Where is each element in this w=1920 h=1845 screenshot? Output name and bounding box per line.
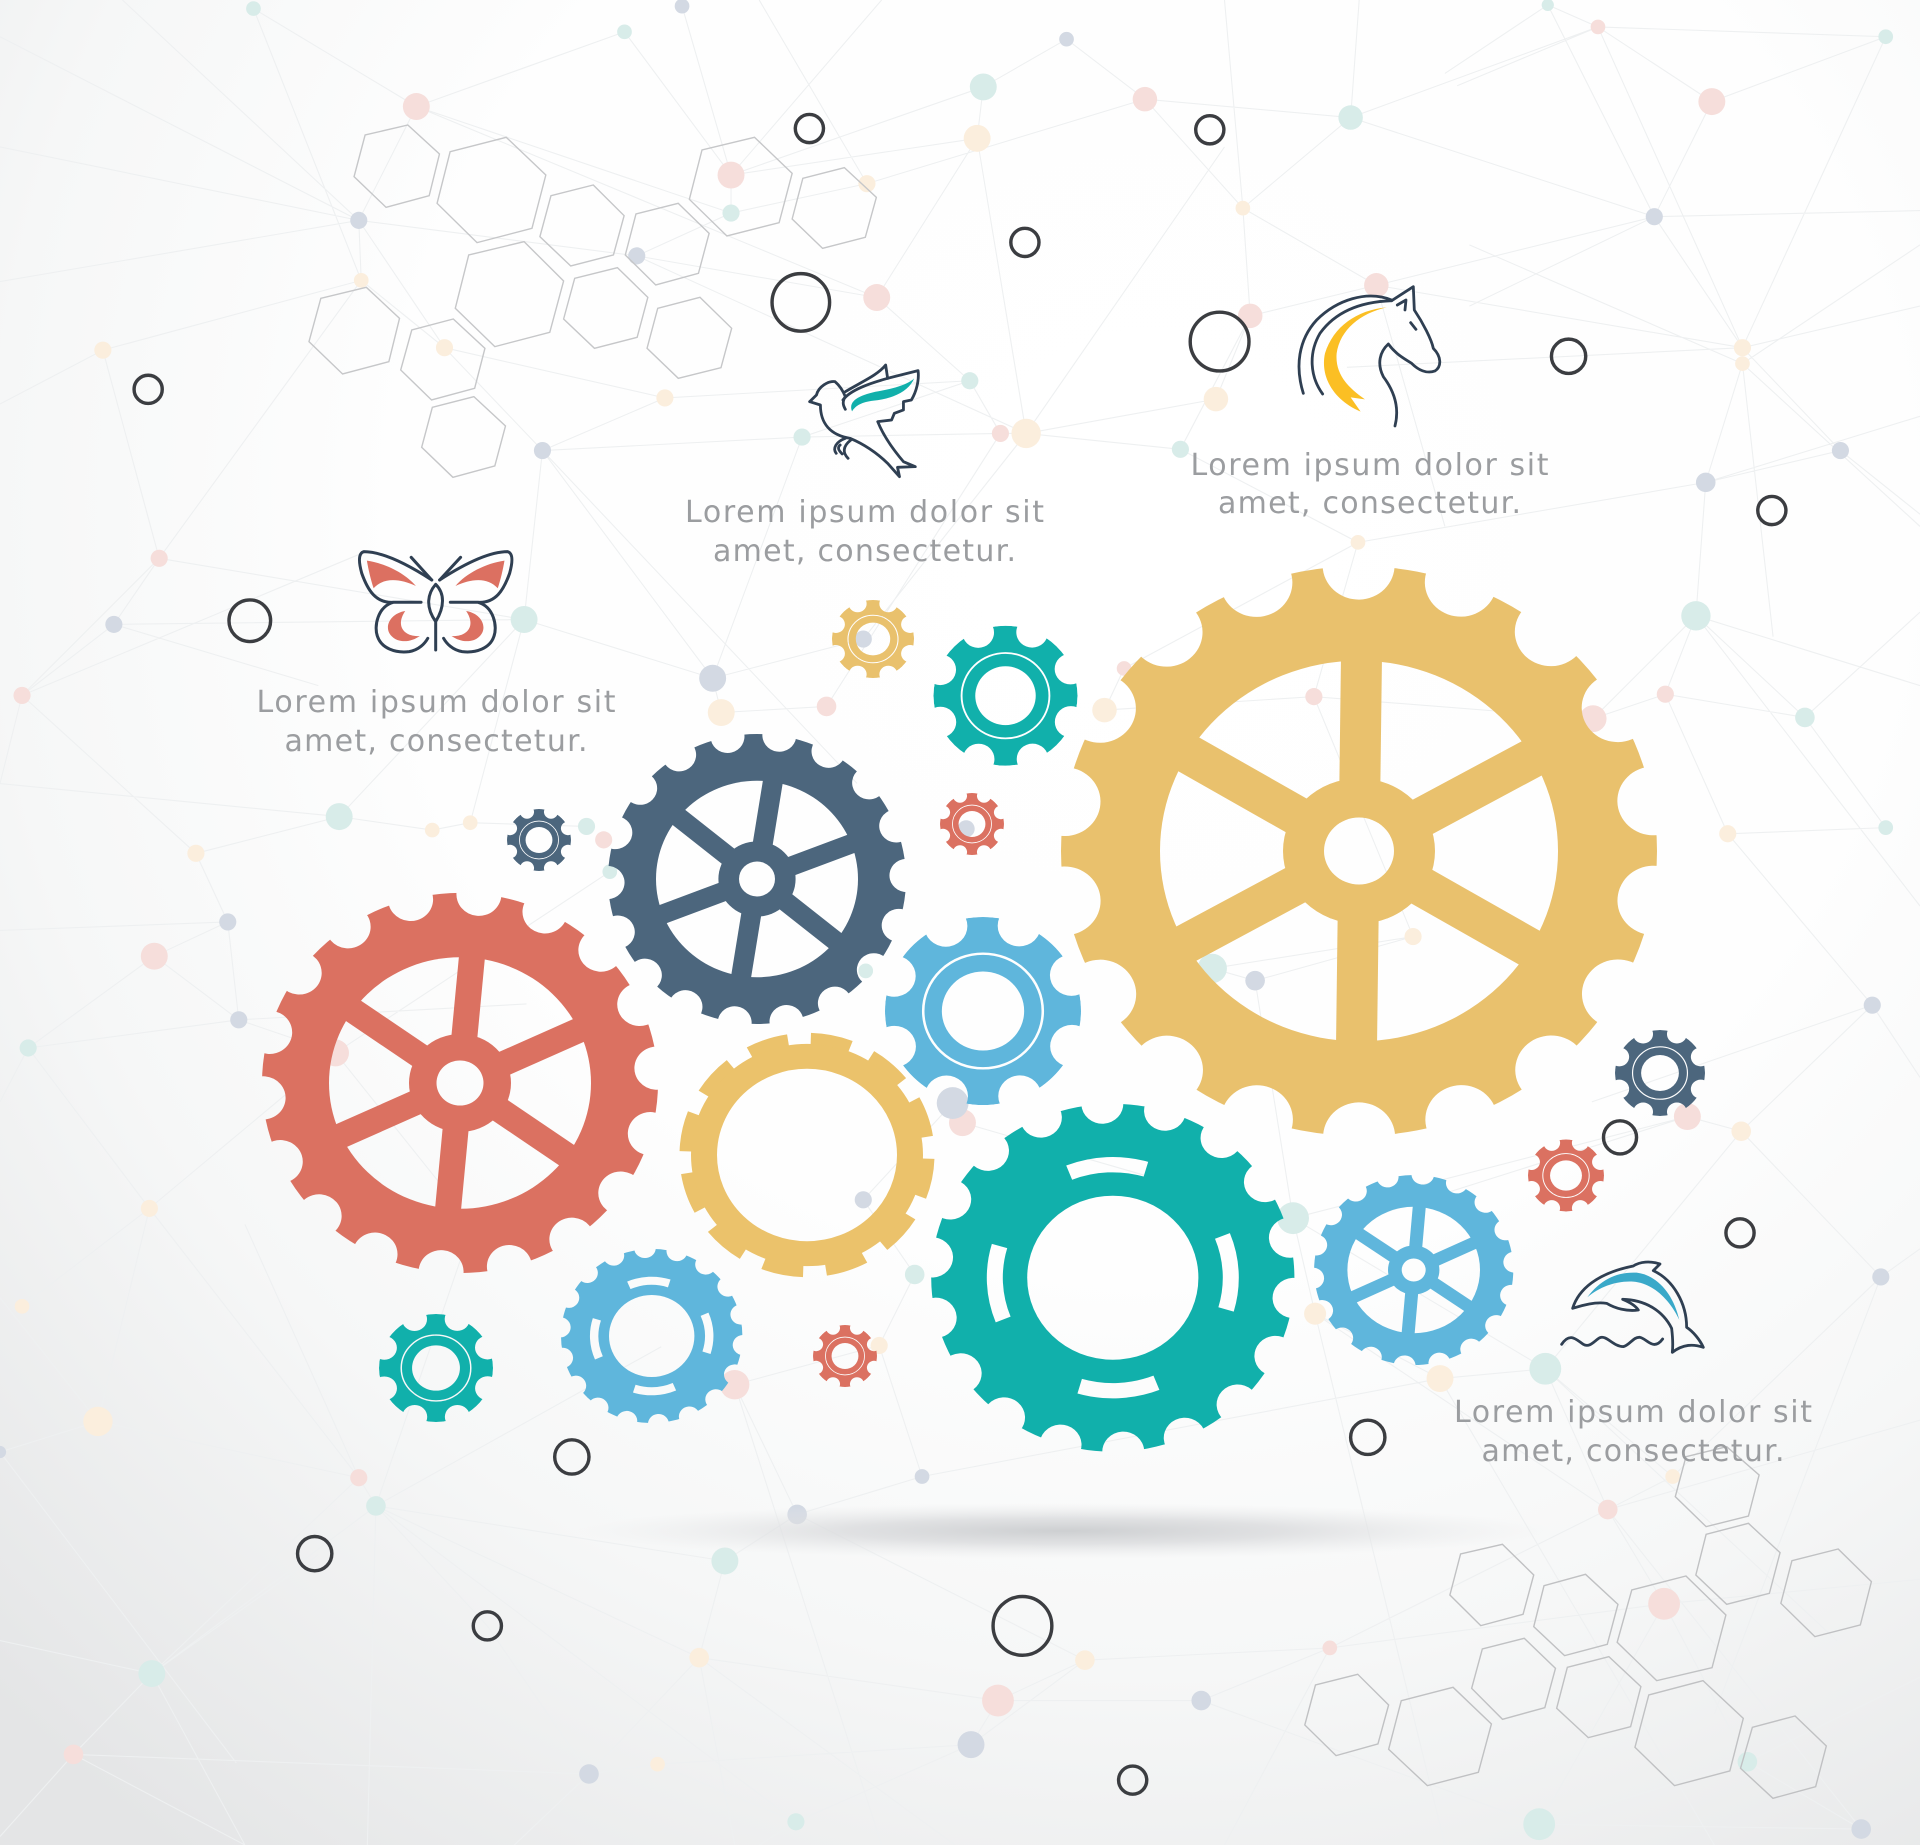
outlined circles bbox=[134, 114, 1786, 1794]
text block: butterfly bbox=[256, 685, 616, 759]
text block: butterfly: amet, consectetur. bbox=[284, 724, 588, 759]
ground shadow bbox=[575, 1503, 1555, 1559]
gear: light blue ringed bbox=[885, 917, 1081, 1105]
text block: horse bbox=[1190, 448, 1549, 521]
gear: light blue spoked wheel bbox=[1314, 1175, 1514, 1365]
gear: large teal with dashes bbox=[931, 1104, 1294, 1452]
gear: small dark blue left bbox=[507, 809, 571, 871]
gear: light blue with dashes bbox=[561, 1249, 742, 1423]
icon: butterfly bbox=[359, 552, 512, 652]
gear: small dark blue right bbox=[1615, 1030, 1705, 1116]
icon: bird bbox=[810, 365, 918, 477]
text block: dolphin: amet, consectetur. bbox=[1482, 1434, 1784, 1469]
hexagon cluster: top left bbox=[309, 125, 876, 477]
gear: small red bottom bbox=[813, 1325, 877, 1387]
gear: small red right bbox=[1528, 1140, 1604, 1212]
gear: large yellow wheel bbox=[1061, 568, 1657, 1134]
text block: dolphin bbox=[1454, 1395, 1812, 1469]
gear: small red centre bbox=[940, 793, 1004, 855]
text block: butterfly: Lorem ipsum dolor sit bbox=[256, 685, 616, 720]
text block: dolphin: Lorem ipsum dolor sit bbox=[1454, 1395, 1812, 1430]
gear: small teal top bbox=[934, 626, 1078, 766]
hexagon cluster: bottom right bbox=[1305, 1447, 1871, 1798]
text block: horse: Lorem ipsum dolor sit bbox=[1190, 448, 1549, 483]
gear: red wheel bbox=[262, 892, 658, 1273]
text block: bird: Lorem ipsum dolor sit bbox=[685, 495, 1044, 530]
icon: dolphin bbox=[1562, 1262, 1703, 1352]
text block: bird bbox=[685, 495, 1044, 569]
gear: small teal bottom bbox=[379, 1314, 493, 1422]
icon: horse bbox=[1299, 287, 1440, 426]
text block: bird: amet, consectetur. bbox=[713, 534, 1016, 569]
gear: yellow ring bbox=[682, 1035, 932, 1275]
text block: horse: amet, consectetur. bbox=[1218, 486, 1521, 521]
gear: dark blue wheel bbox=[608, 734, 906, 1024]
gear: small yellow bbox=[832, 600, 914, 678]
